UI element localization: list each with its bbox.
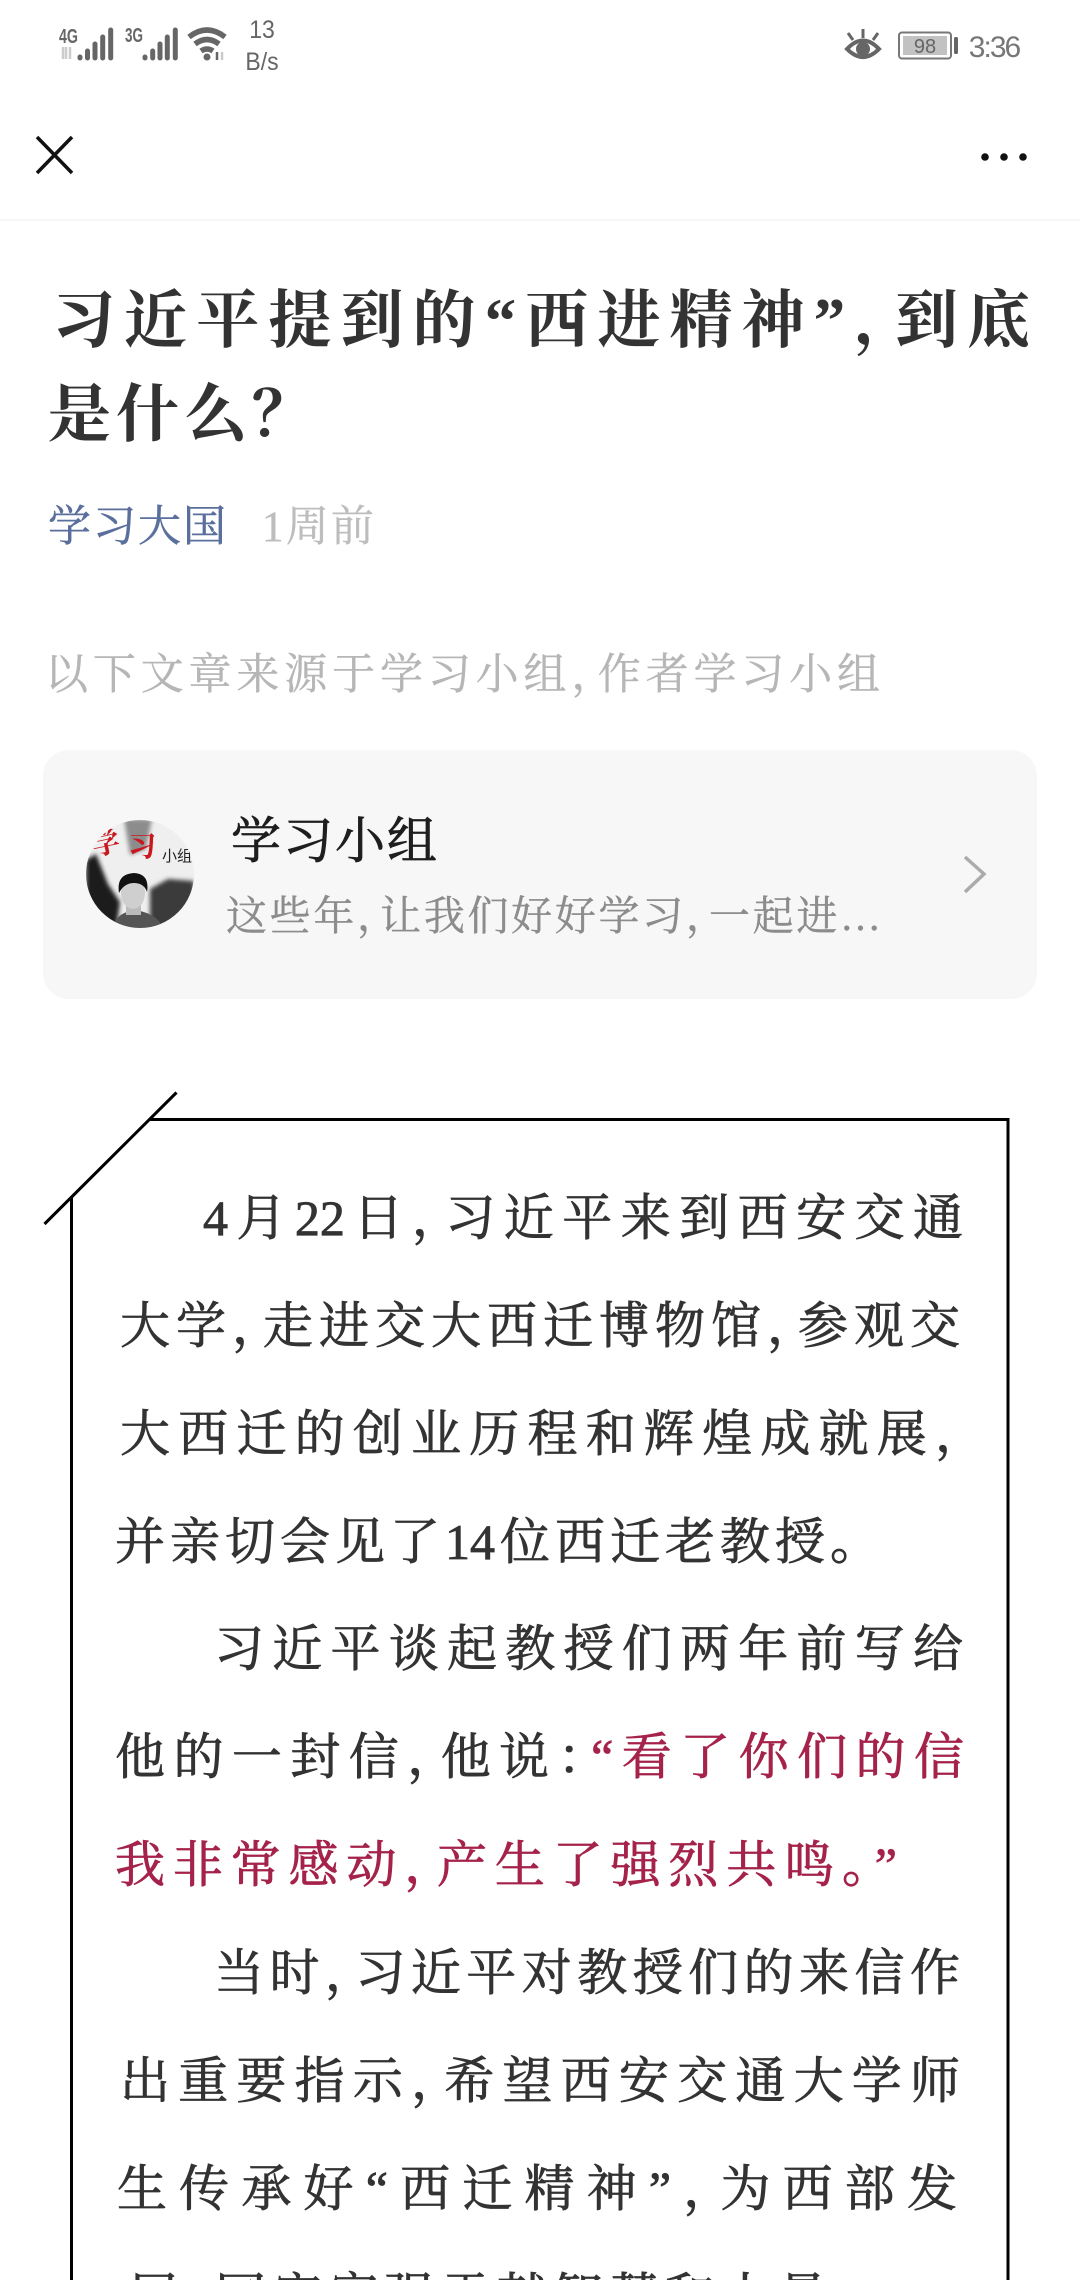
- network speed: B/s: [245, 47, 279, 76]
- icon: battery: [898, 32, 958, 60]
- status bar: [59, 15, 1020, 76]
- icon: account avatar: 学: [88, 820, 123, 865]
- title: 是什么？: [48, 380, 288, 450]
- paragraph 3: 出重要指示，希望西安交通大学师: [120, 2053, 960, 2109]
- icon: cellular and wifi signals: 4G: [59, 26, 78, 48]
- paragraph 1: [115, 1190, 963, 1570]
- account name: 学习小组: [231, 813, 437, 869]
- article body text: [115, 1190, 964, 2280]
- icon: account avatar: 习: [128, 825, 156, 865]
- article meta: author and time: 学习大国: [48, 504, 226, 551]
- paragraph 3: 生传承好“西迁精神”，为西部发: [117, 2161, 957, 2217]
- icon: eye comfort: [844, 29, 882, 60]
- article meta: author and time: [48, 504, 374, 551]
- paragraph 2 with red quotation: 我非常感动，产生了强烈共鸣。”: [115, 1837, 897, 1893]
- icon: more: [981, 153, 1027, 161]
- icon: chevron: [964, 856, 986, 894]
- paragraph 1: 大学，走进交大西迁博物馆，参观交: [120, 1298, 960, 1354]
- paragraph 2 with red quotation: 他的一封信，他说：“看了你们的信: [115, 1729, 964, 1785]
- paragraph 3: 当时，习近平对教授们的来信作: [214, 1945, 960, 2001]
- network speed: [245, 15, 279, 76]
- paragraph 1: 并亲切会见了14位西迁老教授。: [115, 1514, 855, 1570]
- account description: 这些年，让我们好好学习，一起进…: [226, 893, 881, 939]
- network speed: 13: [249, 15, 275, 44]
- icon: account avatar: 小组: [162, 845, 192, 866]
- panel: source account card: [86, 815, 987, 939]
- source notice: 以下文章来源于学习小组，作者学习小组: [45, 652, 880, 699]
- paragraph 1: 大西迁的创业历程和辉煌成就展，: [120, 1406, 960, 1462]
- article meta: author and time: 1周前: [262, 504, 374, 551]
- title: [48, 286, 1030, 450]
- navigation bar: [36, 136, 1027, 174]
- paragraph 2 with red quotation: [115, 1621, 964, 1893]
- paragraph 3: [117, 1945, 960, 2280]
- icon: account avatar: [86, 820, 194, 928]
- paragraph 2 with red quotation: 习近平谈起教授们两年前写给: [214, 1621, 963, 1677]
- title: 习近平提到的“西进精神”，到底: [52, 286, 1030, 356]
- icon: battery: 98: [914, 36, 936, 58]
- paragraph 1: 4月22日，习近平来到西安交通: [203, 1190, 963, 1246]
- icon: cellular and wifi signals: [59, 25, 227, 60]
- article frame with diagonal corner: [44, 1091, 1010, 2280]
- clock: 3:36: [969, 31, 1019, 64]
- icon: close: [36, 136, 74, 174]
- icon: cellular and wifi signals: 3G: [125, 25, 143, 47]
